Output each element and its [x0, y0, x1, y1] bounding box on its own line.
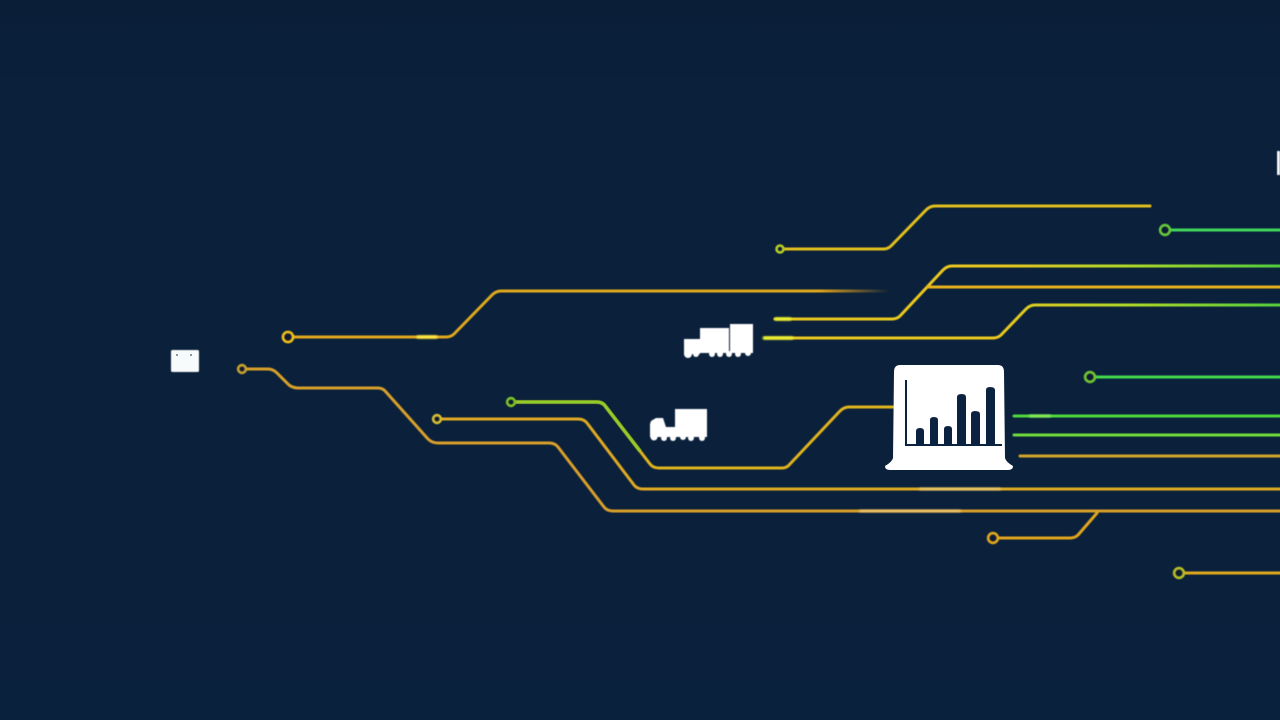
trace: left tan	[247, 369, 1280, 511]
node: top right green	[1160, 225, 1170, 235]
trace: yellow to green upper	[775, 266, 1280, 319]
node: top yellow	[776, 245, 784, 253]
node: bottom amber	[988, 533, 998, 543]
trace: olive to laptop	[516, 402, 893, 468]
circuit traces: amber and gold	[247, 206, 1280, 573]
trace: yellow to green lower	[765, 305, 1280, 338]
icon: small box	[171, 350, 199, 372]
icon: double truck	[684, 324, 753, 358]
trace: top right green	[1171, 228, 1280, 232]
trace: right green	[1096, 376, 1280, 378]
node: middle	[433, 415, 441, 423]
icon: laptop with bar chart	[885, 365, 1013, 470]
trace: laptop gold	[1020, 454, 1280, 458]
trace: laptop green one	[1014, 414, 1280, 418]
green segment on olive trace	[516, 402, 640, 451]
trace highlights	[418, 319, 1050, 511]
trace: laptop green two	[1014, 434, 1280, 436]
trace: top yellow	[785, 206, 1150, 249]
icon: clipped edge element	[1277, 151, 1280, 175]
node: right green	[1085, 372, 1095, 382]
terminal nodes	[238, 225, 1184, 578]
trace: upper long amber	[294, 291, 820, 337]
trace: upper amber fade	[820, 290, 888, 292]
trace: bottom right	[1185, 572, 1280, 574]
node: left tan	[238, 365, 246, 373]
node: bottom right	[1174, 568, 1184, 578]
trace: middle gold	[442, 419, 1280, 489]
trace: bottom branch	[999, 513, 1097, 538]
icon: single truck	[650, 409, 707, 441]
node: left amber	[283, 332, 293, 342]
node: green	[507, 398, 515, 406]
trace: gold branch	[928, 286, 1280, 288]
